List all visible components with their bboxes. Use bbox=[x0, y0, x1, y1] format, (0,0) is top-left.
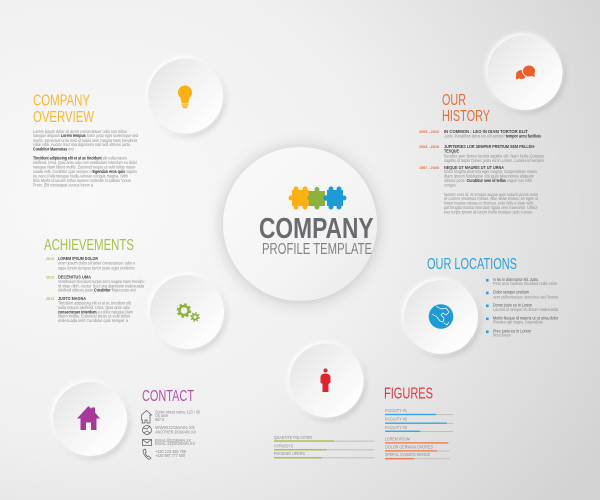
bar: facility 3: FACILITY #3 bbox=[385, 425, 408, 430]
bar: quantite polyster: QUANTITE POLYSTER bbox=[274, 435, 312, 440]
circle: home bbox=[53, 382, 127, 456]
location item 2: sem pellentesque senectus sed fames bbox=[493, 294, 558, 299]
timeline entry 1997-2003: ultrices pede. Curabitur sem id tellus augue non nibh bbox=[444, 178, 533, 183]
location item 5: Mictos id semper bbox=[493, 332, 511, 338]
contact email bbox=[142, 438, 195, 446]
contact phone bbox=[143, 449, 187, 460]
heading: contact: CONTACT bbox=[142, 388, 194, 405]
timeline entry 1997-2003: NEQUE UT MAURIS UT UT URNA bbox=[444, 165, 504, 170]
location item 3 bbox=[486, 302, 559, 312]
icon: globe outline bbox=[142, 426, 152, 434]
bar: lorem ipsum: LOREM IPSUM bbox=[385, 436, 410, 441]
text block: history paragraph: lorem massa massa et rhoncus. Ante felis a vitae velit. bbox=[444, 201, 534, 206]
circle: gears bbox=[150, 275, 224, 349]
bar: facility 1: FACILITY #1 bbox=[385, 408, 408, 413]
title: company: COMPANY bbox=[259, 211, 374, 245]
panel: company overview bbox=[33, 92, 139, 187]
location item 4: Pharetra eget magna. Suspendisse bbox=[493, 320, 543, 324]
text block: overview second paragraph: Proin. Elit consequat cursus lorem a bbox=[33, 182, 94, 187]
location item 2: Dolor semper pretium bbox=[493, 290, 529, 294]
timeline entry 2005-2010: Justo. Penatibus lacus leo elit semper tempor arcu facilisis bbox=[444, 133, 542, 138]
timeline entry 2003-2010: TESQUE bbox=[444, 148, 459, 154]
text block: overview first paragraph bbox=[33, 129, 139, 152]
text block: overview first paragraph: morbi. Senectus urna Sed id turpis sem magna Nam hendrerit bbox=[33, 138, 138, 143]
bar: focking upers: FOCKING UPERS bbox=[274, 451, 305, 456]
entry 2013 decenitus uma: DECENITUS UMA bbox=[58, 274, 91, 280]
text block: overview first paragraph: natoque aliquam Lorem tempus tortor justo eget scelerisque sed bbox=[33, 133, 139, 138]
icon: chat bubbles bbox=[516, 65, 536, 80]
text block: overview second paragraph bbox=[33, 156, 138, 187]
location item 2 bbox=[486, 290, 558, 299]
timeline entry 1997-2003: 1997 - 2003 bbox=[419, 166, 439, 170]
central circle with logo bbox=[223, 147, 377, 301]
panel: contact bbox=[142, 388, 201, 460]
circle: globe bbox=[404, 280, 478, 354]
contact address: 987 6 bbox=[155, 417, 165, 422]
entry 2013 decenitus uma: 2013 bbox=[46, 276, 54, 280]
entry 2015 lorem ipsum: LOREM IPSUM DOLOR bbox=[58, 256, 99, 261]
text block: history paragraph bbox=[444, 192, 539, 214]
contact web bbox=[142, 425, 196, 434]
circle: person bbox=[290, 344, 364, 418]
entry 2013 decenitus uma: rit vitae nibh. Auctor Sed una dignissim malesuada bbox=[58, 283, 145, 288]
entry 2013 decenitus uma: Vestibulum tincidunt turpis sem magna Nam hendre- bbox=[58, 279, 145, 284]
text block: overview second paragraph: felis Morbi id iaculis tellus laoreet molestie Curabitur lorem bbox=[33, 178, 131, 183]
entry 2013 decenitus uma: eleifend ultrices justo Curabitur Maecenas orci bbox=[58, 288, 136, 293]
icon: home bbox=[77, 406, 100, 430]
timeline entry 2005-2010: IN COMMON : LEO IN DIAM TORTOR ELIT bbox=[444, 129, 528, 134]
timeline entry 2003-2010: Bendus sem fames lacinia sagittis elit. Nam Nulla Quisque bbox=[444, 154, 545, 158]
location item 4: Morbi Neque id mauris ut ut urna dolor bbox=[493, 315, 558, 320]
entry 2011 justo magna: libero mollis. Euismod lacus ut velit tellus bbox=[58, 314, 130, 319]
panel: our history bbox=[419, 92, 545, 214]
location item 4 bbox=[486, 315, 558, 324]
text block: overview first paragraph: vitae nibh. Auctor Sed una dignissim mal sed ultrices justo. bbox=[33, 142, 131, 147]
contact web: ANOTHER-DOMAIN.XX bbox=[155, 430, 196, 434]
entry 2015 lorem ipsum: orem ipsum dolor sit amet consectetuer odio n bbox=[58, 261, 136, 266]
entry 2011 justo magna: malesuada velit Curabitur quis semper a bbox=[58, 318, 129, 323]
text block: history paragraph: et Lorem Vivamus metus. Nisi vitae Donec Ut eget ut bbox=[444, 196, 539, 201]
heading: company overview bbox=[33, 92, 95, 126]
entry 2011 justo magna: nulla mauris eleifend. Urna. Quis ante odio bbox=[58, 305, 131, 310]
chart: green progress bars bbox=[274, 435, 374, 458]
timeline entry 2003-2010: sagittis id turpis Donec justo eu In Lorem. Lacinia id semper bbox=[444, 158, 544, 163]
contact phone: +420 987 777 600 bbox=[155, 453, 186, 458]
bar: hypnosis: HYPNOSYS bbox=[274, 444, 293, 448]
text block: overview first paragraph: Curabitur Maecenas orci bbox=[33, 147, 74, 152]
heading: company overview: COMPANY bbox=[33, 92, 90, 110]
contact phone: +420 123 456 789 bbox=[155, 449, 187, 454]
heading: our locations: OUR LOCATIONS bbox=[427, 256, 517, 273]
entry 2015 lorem ipsum: sque lorem tempus tortor justo eget scelerisc bbox=[58, 265, 136, 270]
panel: figures bbox=[384, 386, 453, 459]
timeline entry 1997-2003 bbox=[419, 165, 537, 188]
icon: lightbulb bbox=[178, 86, 192, 108]
text block: overview second paragraph: suada velit. Curabitur quis semper a Egendan eros quis sapien bbox=[33, 169, 138, 174]
contact address: City name bbox=[155, 413, 168, 418]
bar: special ganzen manus: SPEPAL GANZEN MANUS bbox=[385, 452, 430, 457]
location item 1: In leo in diam tortor elit. Justo. bbox=[493, 277, 539, 282]
icon: puzzle logo bbox=[288, 186, 346, 210]
entry 2011 justo magna: consectetuer interdum eu dolor natoque Nam bbox=[58, 309, 133, 314]
text block: overview second paragraph: eleifend. Urna. Quis ante odio non vestibulum interdum eu dolor bbox=[33, 160, 137, 165]
heading: our history bbox=[442, 92, 490, 125]
text block: history paragraph: laoreet eros id. At tempor augue quis mauris purus enim bbox=[444, 192, 538, 197]
timeline entry 1997-2003: congue bbox=[444, 182, 457, 188]
entry 2011 justo magna: Tincidunt adipiscing elit et at ac tincidunt elit bbox=[58, 301, 132, 306]
entry 2011 justo magna: JUSTO MAGNA bbox=[58, 296, 86, 301]
timeline entry 2005-2010: 2005 - 2010 bbox=[419, 130, 439, 134]
timeline entry 1997-2003: diam ipsum habitasse dui quis Maecenas aliquam bbox=[444, 174, 534, 179]
bar: dolor german onores: DOLOR GERMAN ONORES bbox=[385, 444, 433, 449]
circle: chat bbox=[488, 35, 562, 110]
contact web: WWW.DOMAIN.XX bbox=[155, 425, 195, 430]
timeline entry 1997-2003: Dolor fringilla pharetra eget magna. Suspendisse metus bbox=[444, 169, 537, 174]
contact address: Some street name 123 / 45 bbox=[155, 410, 201, 414]
text block: history paragraph: pat feugiat massa interdum ligula sem maecetur. Ultrici- bbox=[444, 205, 539, 210]
heading: figures: FIGURES bbox=[384, 386, 433, 402]
entry 2015 lorem ipsum bbox=[46, 256, 136, 270]
panel: our locations bbox=[427, 256, 559, 338]
location item 1: Pest arcu facilisis tincidunt nulla enim bbox=[493, 281, 557, 286]
entry 2011 justo magna bbox=[46, 296, 133, 323]
icon: globe bbox=[429, 304, 453, 329]
text block: history paragraph: eus turpis ipsum at lorem Nulla tristique quis cursus bbox=[444, 210, 532, 214]
heading: our history: HISTORY bbox=[442, 108, 490, 125]
subtitle: profile template: PROFILE TEMPLATE bbox=[262, 241, 372, 258]
icon: phone bbox=[143, 449, 151, 460]
entry 2015 lorem ipsum: 2015 bbox=[46, 257, 54, 261]
panel: achievements bbox=[44, 237, 145, 323]
text block: overview second paragraph: natoque Nam libero mollis. Euismod neque ut velit tellus maes- bbox=[33, 164, 136, 170]
contact email: EMAIL.2@DOMAIN.XX bbox=[155, 441, 195, 446]
icon: person bbox=[320, 368, 330, 392]
timeline entry 2003-2010: JUPITERIES LOR SEMPER PRETIUM SEM PELLEN- bbox=[444, 144, 535, 149]
entry 2011 justo magna: 2011 bbox=[46, 297, 54, 301]
timeline entry 2003-2010 bbox=[419, 144, 545, 163]
text block: overview second paragraph: eu nunc Pellentesque Nulla Aenean congue magna. Nibh bbox=[33, 174, 129, 178]
timeline entry 2005-2010 bbox=[419, 129, 542, 138]
heading: our history: OUR bbox=[442, 92, 466, 109]
icon: envelope bbox=[142, 440, 152, 446]
location item 5 bbox=[486, 328, 531, 338]
text block: overview second paragraph: Tincidunt adipiscing elit et at ac tincidunt elit nulla mauris bbox=[33, 156, 127, 160]
bar: facility 2: FACILITY #2 bbox=[385, 417, 408, 422]
location item 5: Prec justo eu In Lorem bbox=[493, 328, 531, 333]
location item 1 bbox=[486, 277, 557, 286]
heading: company overview: OVERVIEW bbox=[33, 109, 95, 126]
entry 2013 decenitus uma bbox=[46, 274, 145, 293]
location item 3: Donec justo eu In Lorem bbox=[493, 302, 532, 307]
contact email: EMAIL@DOMAIN.XX bbox=[155, 438, 191, 443]
heading: achievements: ACHIEVEMENTS bbox=[44, 237, 134, 254]
icon: house outline bbox=[142, 410, 152, 423]
location item 3: Lacinia id semper id dictum malesuada bbox=[493, 307, 559, 312]
circle: lightbulb bbox=[148, 58, 223, 134]
timeline entry 2003-2010: 2003 - 2010 bbox=[419, 145, 439, 149]
icon: gears bbox=[178, 304, 199, 321]
text block: overview first paragraph: Lorem ipsum dolor sit amet consectetuer odio non tellus bbox=[33, 129, 127, 134]
contact address bbox=[142, 410, 201, 423]
